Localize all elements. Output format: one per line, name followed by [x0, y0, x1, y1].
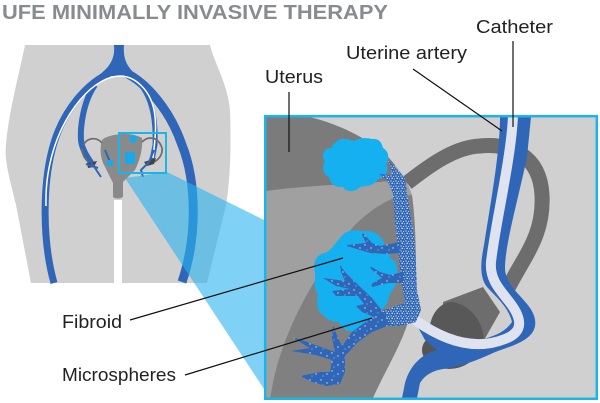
branch A [347, 233, 401, 254]
branch C [323, 265, 388, 318]
fallopian tube [407, 146, 542, 288]
label: Microspheres: Microspheres [62, 364, 176, 385]
uterus body light region [265, 116, 416, 400]
small uterus [82, 134, 162, 198]
catheter [415, 116, 519, 344]
zoom beam [125, 172, 266, 392]
branch B [370, 266, 403, 287]
label: Uterus: Uterus [265, 66, 323, 87]
small vessels [82, 145, 154, 177]
zoom box [119, 133, 166, 173]
microsphere vessels [291, 160, 421, 386]
small ovaries [87, 158, 156, 168]
label: Catheter [476, 16, 553, 127]
artery [402, 117, 535, 398]
title: UFE MINIMALLY INVASIVE THERAPY [2, 2, 389, 24]
label: Uterine artery: Uterine artery [346, 42, 468, 63]
small fibroids [107, 135, 137, 166]
ovary [422, 287, 500, 369]
large fibroid [314, 230, 397, 331]
label: Uterine artery [346, 42, 502, 131]
body silhouette [6, 45, 231, 283]
top fibroid [323, 138, 388, 191]
detail panel [265, 116, 597, 400]
small fallopian tubes [82, 138, 162, 164]
uterus lower dark region [270, 195, 416, 400]
uterus top dark region [265, 116, 395, 191]
label: Microspheres [62, 318, 372, 385]
label: Uterus [265, 66, 323, 152]
artery tree [45, 45, 193, 283]
main dotted trunk [378, 160, 421, 326]
panel border [265, 116, 597, 399]
label: Fibroid: Fibroid [62, 311, 122, 332]
lower branches [291, 316, 390, 386]
label: Catheter: Catheter [476, 16, 553, 37]
label: Fibroid [62, 258, 343, 332]
